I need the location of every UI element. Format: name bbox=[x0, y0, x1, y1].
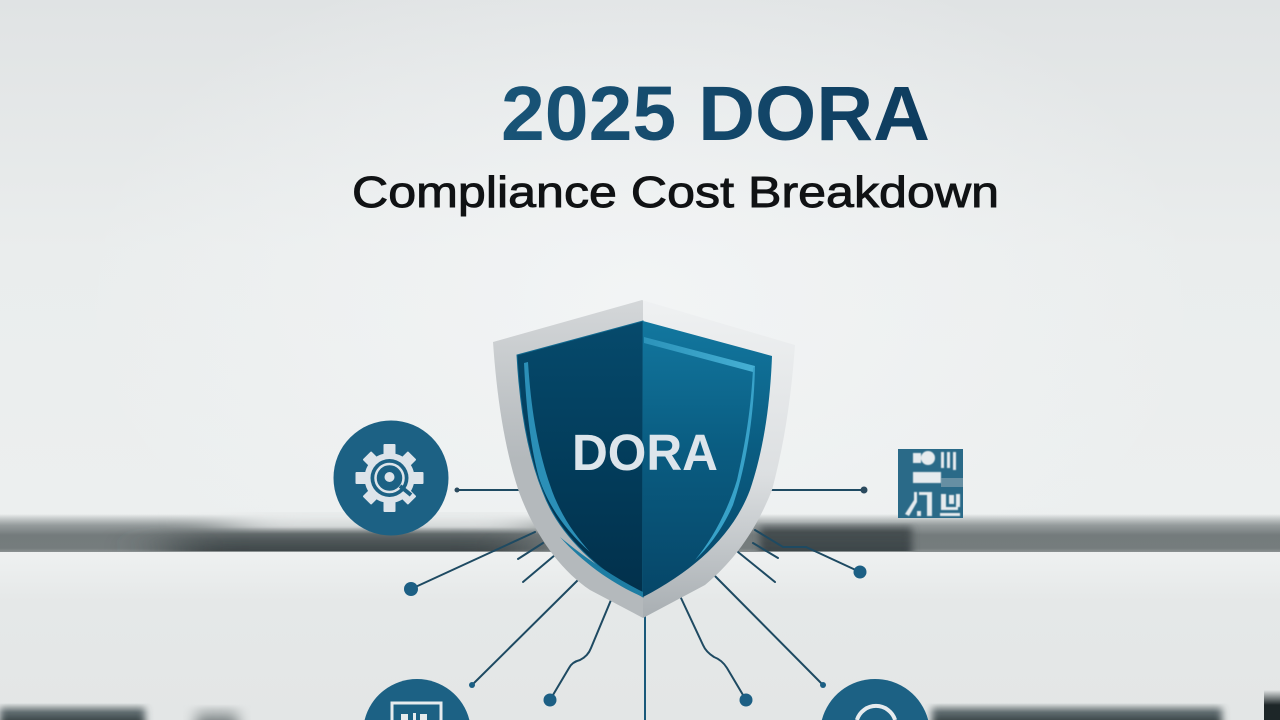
shield rim left bbox=[493, 300, 643, 618]
connector: upper right elbow bbox=[755, 530, 860, 572]
connector: lower left straight bbox=[471, 577, 581, 686]
shield highlight left bbox=[524, 362, 590, 552]
connector lines bbox=[411, 490, 865, 720]
shield highlight right bbox=[695, 366, 755, 560]
connector end dots bbox=[404, 486, 868, 706]
connector: right horizontal bbox=[770, 489, 865, 491]
gear teeth bbox=[356, 444, 424, 512]
connector: left short one bbox=[518, 543, 543, 559]
connector: centre vertical bbox=[644, 615, 646, 720]
connector: lower right straight bbox=[712, 573, 824, 686]
connector: left short two bbox=[523, 555, 555, 582]
blurred horizontal band bbox=[0, 512, 1280, 552]
connector: right short one bbox=[753, 543, 778, 558]
shield bbox=[493, 300, 795, 618]
connector: left horizontal bbox=[456, 489, 520, 491]
shield face right bbox=[643, 321, 772, 597]
connector: right short two bbox=[738, 552, 775, 582]
shield rim right bbox=[642, 300, 795, 618]
shield lower edge highlight bbox=[560, 537, 643, 597]
icon: gear circle bbox=[334, 420, 448, 536]
shield label: DORA bbox=[572, 424, 718, 481]
shield highlight top right bbox=[644, 337, 755, 372]
icon: lower left circle bbox=[365, 679, 469, 720]
connector: upper left diagonal bbox=[411, 532, 535, 589]
connector: lower right curved bbox=[681, 598, 746, 700]
icon: document square bbox=[898, 449, 963, 518]
blurred bottom shapes bbox=[0, 690, 1280, 720]
connector: lower left curved bbox=[550, 600, 611, 700]
title: 2025 DORA bbox=[501, 71, 930, 157]
shield face left bbox=[517, 321, 643, 597]
icon: lower right circle bbox=[822, 679, 928, 720]
subtitle: Compliance Cost Breakdown bbox=[352, 168, 999, 217]
